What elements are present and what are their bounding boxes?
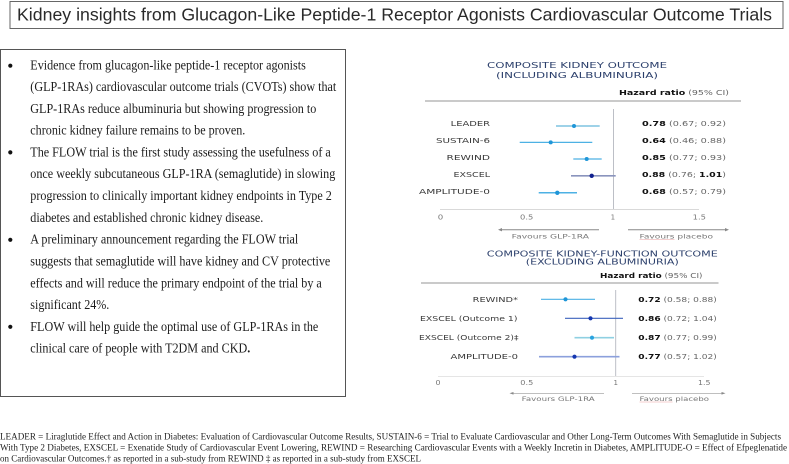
chart heading: COMPOSITE KIDNEY-FUNCTION OUTCOME [487, 248, 718, 258]
arrow: favours GLP-1RA [498, 228, 599, 240]
row: EXSCEL outcome 2: 0.87 (0.77; 0.99) [638, 333, 717, 342]
row: REWIND: REWIND [446, 153, 491, 162]
chart heading [487, 248, 718, 267]
row: EXSCEL outcome 1: 0.86 (0.72; 1.04) [638, 314, 717, 323]
row: REWIND: REWIND* [473, 295, 519, 304]
chart heading: (EXCLUDING ALBUMINURIA) [526, 257, 679, 267]
bullet 2: FLOW trial: progression to clinically important kidney endpoints in Type 2 [30, 188, 332, 203]
bullet 1: evidence from CVOTs: GLP-1RAs reduce albuminuria but showing progression to [30, 101, 317, 116]
arrow: favours placebo [632, 392, 726, 403]
bullet 4: FLOW guidance: clinical care of people with T2DM and CKD. [30, 341, 250, 356]
footnote [0, 431, 787, 464]
row: LEADER [451, 119, 726, 128]
x axis labels: 0.5 [520, 379, 533, 387]
arrow: favours GLP-1RA [510, 392, 604, 403]
bullet 1: evidence from CVOTs [8, 57, 337, 138]
bullet 1: evidence from CVOTs: chronic kidney failure remains to be proven. [30, 122, 245, 138]
row: EXSCEL outcome 2: EXSCEL (Outcome 2)‡ [419, 333, 519, 342]
bullet 2: FLOW trial: The FLOW trial is the first study assessing the usefulness of a [30, 144, 331, 159]
bullet 3: preliminary announcement: A preliminary announcement regarding the FLOW trial [30, 232, 299, 247]
footnote: on Cardiovascular Outcomes.† as reported in a sub-study from REWIND ‡ as reported in a sub-study from EXSCEL [0, 453, 421, 464]
bullet 4: FLOW guidance [8, 319, 318, 356]
chart: composite kidney outcome [419, 60, 741, 240]
x axis labels: 0 [436, 379, 440, 387]
row: SUSTAIN-6 [436, 136, 726, 145]
row: AMPLITUDE-0 [419, 187, 726, 196]
bullet 3: preliminary announcement: effects and will reduce the primary endpoint of the trial by a [30, 275, 322, 290]
row: AMPLITUDE-0: 0.77 (0.57; 1.02) [638, 352, 717, 361]
x axis labels: 1 [611, 214, 615, 222]
x axis labels: 0 [438, 214, 443, 222]
bullet 4: FLOW guidance: FLOW will help guide the optimal use of GLP-1RAs in the [30, 319, 318, 334]
x axis labels [436, 379, 710, 387]
x axis labels: 1 [614, 379, 618, 387]
row: EXSCEL outcome 1 [420, 314, 717, 323]
x axis labels: 1.5 [693, 214, 706, 222]
chart heading: COMPOSITE KIDNEY OUTCOME [487, 60, 667, 70]
x axis labels [438, 214, 706, 222]
row: EXSCEL outcome 2 [419, 333, 717, 342]
row: LEADER: 0.78 (0.67; 0.92) [642, 119, 726, 128]
row: EXSCEL [454, 170, 726, 179]
title: Kidney insights from Glucagon-Like Peptide-1 Receptor Agonists Cardiovascular Outcome Trials [17, 4, 772, 24]
arrow: favours placebo: Favours placebo [640, 234, 714, 240]
x axis labels: 0.5 [520, 214, 533, 222]
chart heading [487, 60, 667, 80]
row: EXSCEL: EXSCEL [454, 170, 490, 179]
bullet 1: evidence from CVOTs: Evidence from glucagon-like peptide-1 receptor agonists [30, 57, 306, 72]
arrow: favours placebo [628, 228, 729, 240]
hazard ratio header: Hazard ratio (95% CI) [619, 88, 729, 97]
hazard ratio header: Hazard ratio (95% CI) [600, 271, 703, 280]
arrow: favours GLP-1RA: Favours GLP-1RA [522, 397, 595, 403]
arrow: favours GLP-1RA: Favours GLP-1RA [512, 234, 589, 240]
row: REWIND: 0.85 (0.77; 0.93) [642, 153, 726, 162]
panel: key points [0, 50, 346, 396]
bullet 1: evidence from CVOTs: (GLP-1RAs) cardiovascular outcome trials (CVOTs) show that [30, 79, 337, 94]
row: LEADER: LEADER [451, 119, 490, 128]
bullet 2: FLOW trial: once weekly subcutaneous GLP-1RA (semaglutide) in slowing [30, 166, 336, 181]
bullet 3: preliminary announcement: suggests that semaglutide will have kidney and CV protective [30, 254, 330, 268]
row: REWIND [473, 295, 717, 304]
row: REWIND [446, 153, 726, 162]
row: REWIND: 0.72 (0.58; 0.88) [638, 295, 717, 304]
row: AMPLITUDE-0: 0.68 (0.57; 0.79) [642, 187, 726, 196]
row: EXSCEL: 0.88 (0.76; 1.01 ) [642, 170, 726, 179]
x axis labels: 1.5 [698, 379, 710, 387]
bullet 3: preliminary announcement [8, 232, 330, 312]
chart heading: (INCLUDING ALBUMINURIA) [496, 70, 658, 80]
bullet 2: FLOW trial: diabetes and established chronic kidney disease. [30, 210, 263, 225]
bullet 3: preliminary announcement: significant 24%. [30, 297, 109, 312]
chart: composite kidney-function outcome [419, 248, 726, 403]
row: EXSCEL outcome 1: EXSCEL (Outcome 1) [420, 314, 518, 323]
bullet 2: FLOW trial [8, 144, 336, 225]
arrow: favours placebo: Favours placebo [640, 397, 710, 403]
row: SUSTAIN-6: 0.64 (0.46; 0.88) [642, 136, 726, 145]
row: AMPLITUDE-0 [450, 352, 717, 361]
row: AMPLITUDE-0: AMPLITUDE-0 [419, 187, 491, 196]
row: SUSTAIN-6: SUSTAIN-6 [436, 136, 491, 145]
row: AMPLITUDE-0: AMPLITUDE-0 [450, 352, 519, 361]
